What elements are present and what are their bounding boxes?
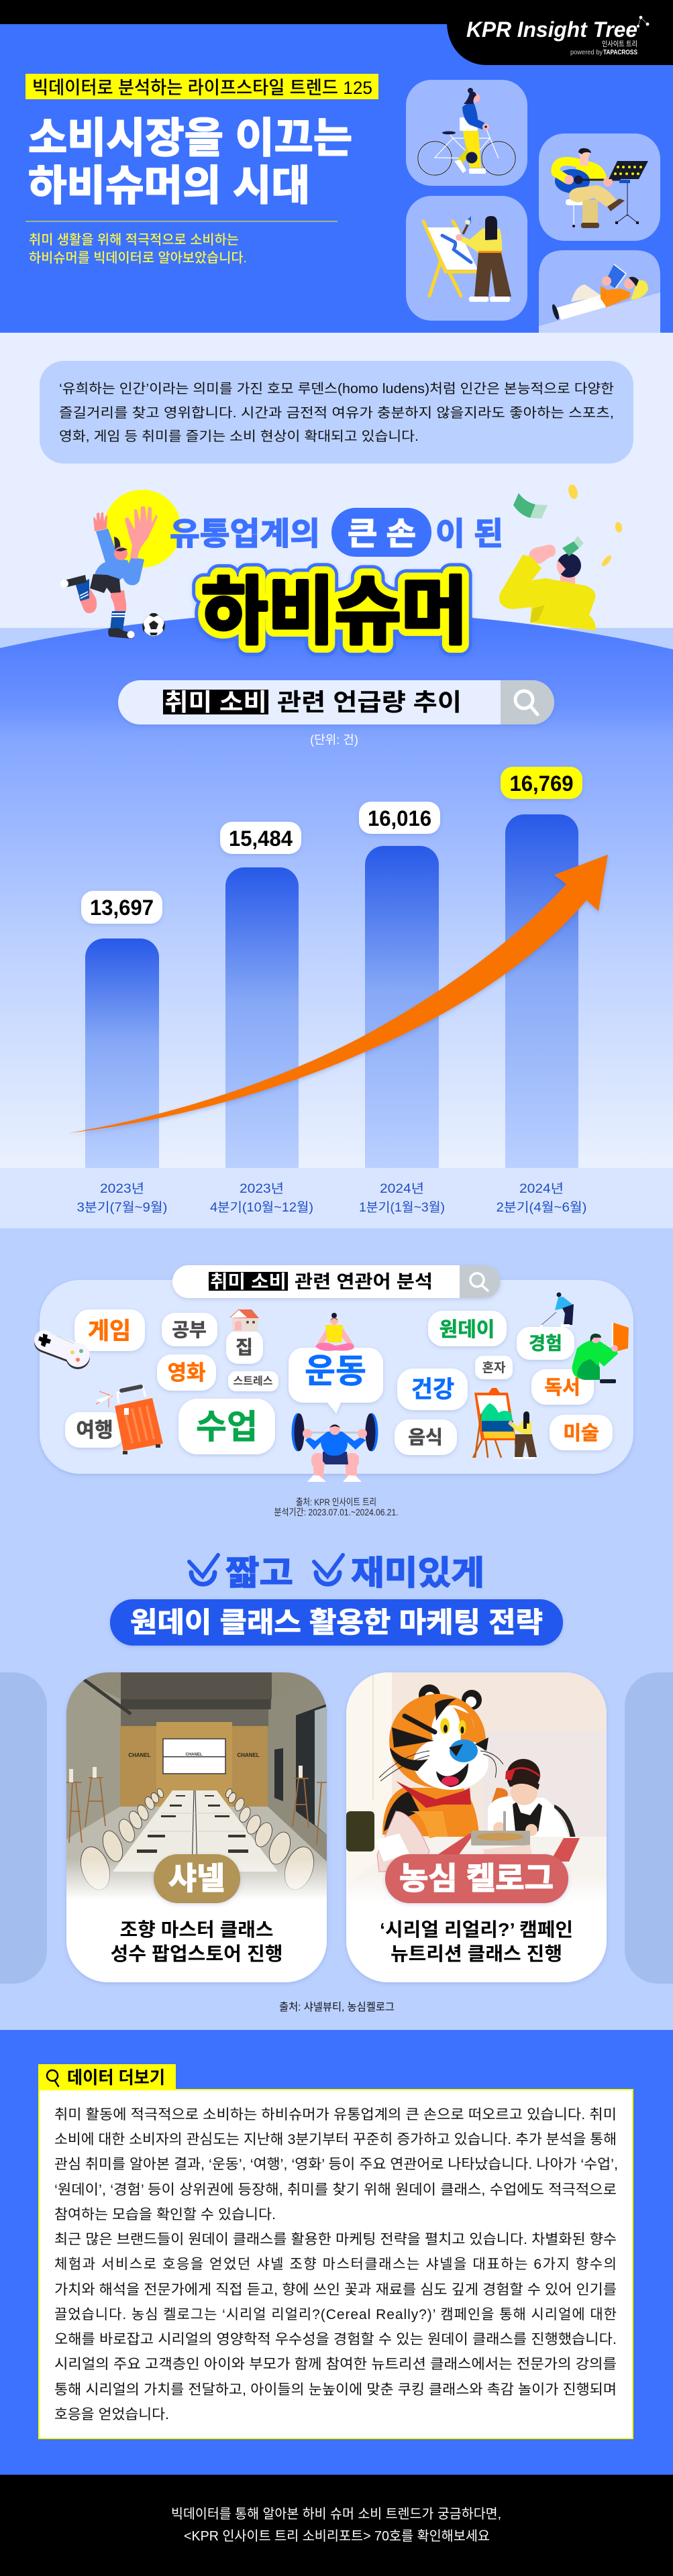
photo: Chanel class room: CHANEL xyxy=(237,1752,260,1758)
axis labels: 2분기(4월~6월) xyxy=(497,1200,586,1215)
card: Chanel xyxy=(66,1672,327,1984)
chart title search bar: 취미 소비 xyxy=(164,688,267,716)
heading: short and fun xyxy=(189,1554,484,1592)
word labels: 미술 xyxy=(563,1422,599,1444)
axis labels: 2023년 xyxy=(100,1181,144,1196)
photo: tiger mascot and child xyxy=(346,1672,607,1984)
bar chart: 13,697 xyxy=(90,896,154,920)
icon: house xyxy=(230,1309,259,1332)
main title: 하비슈머의 시대 xyxy=(28,163,310,209)
illustration: soccer player xyxy=(60,506,158,639)
illustration: golfer xyxy=(540,1292,574,1328)
icon: check two xyxy=(314,1555,343,1585)
panel: analysis text: 통해 시리얼의 가치를 전달하고, 아이들의 눈높이에 맞춘 쿠킹 클래스와 촉감 놀이가 진행되며 xyxy=(54,2382,617,2398)
child xyxy=(488,1796,569,1837)
tab: more data: 데이터 더보기 xyxy=(67,2068,165,2088)
panel: analysis text: 호응을 얻었습니다. xyxy=(54,2407,169,2422)
icon: game controller xyxy=(34,1330,90,1369)
panel: analysis text: 가치와 해석을 전문가에게 직접 듣고, 향에 쓰인 꽃과 재료를 심도 깊게 경험할 수 있어 인기를 xyxy=(54,2282,617,2298)
header logo bar: powered by xyxy=(570,49,603,56)
word labels: 게임 xyxy=(88,1318,131,1344)
table xyxy=(113,1790,278,1872)
Chanel caption xyxy=(110,1919,283,1964)
card: painter xyxy=(406,196,527,321)
word labels xyxy=(76,1318,599,1448)
search bar: related words: 취미 소비 xyxy=(210,1272,287,1292)
table xyxy=(425,1837,607,1888)
stools xyxy=(66,1778,327,1845)
chart title search bar xyxy=(118,680,554,724)
word labels: 여행 xyxy=(76,1419,113,1442)
card: guitarist xyxy=(539,133,660,241)
icon: check one xyxy=(189,1555,218,1585)
footer: 빅데이터를 통해 알아본 하비 슈머 소비 트렌드가 궁금하다면, xyxy=(171,2506,501,2522)
tiger head xyxy=(419,1684,440,1697)
panel: analysis text: ‘원데이’, ‘경험’ 등이 상위권에 등장해, 취미를 찾기 위해 원데이 클래스, 수업에도 적극적으로 xyxy=(54,2182,617,2198)
axis labels: 2023년 xyxy=(240,1181,284,1196)
hero word: hobby-sumer: 하비슈머 xyxy=(201,571,468,653)
growth arrow xyxy=(68,855,608,1133)
side card left xyxy=(0,1672,47,1984)
word labels: 스트레스 xyxy=(234,1375,273,1387)
word labels: 집 xyxy=(236,1337,253,1358)
axis labels: 2024년 xyxy=(519,1181,564,1196)
heading pill xyxy=(110,1599,563,1646)
heading pill: 원데이 클래스 활용한 마케팅 전략 xyxy=(130,1607,543,1638)
illustration: yoga woman xyxy=(315,1313,354,1351)
icon: suitcase and plane xyxy=(96,1386,163,1454)
side card right xyxy=(625,1672,673,1984)
place settings xyxy=(137,1795,248,1853)
bar chart: 16,769 xyxy=(510,771,573,796)
subtitle: 하비슈머를 빅데이터로 알아보았습니다. xyxy=(29,250,247,266)
footer: <KPR 인사이트 트리 소비리포트> 70호를 확인해보세요 xyxy=(184,2528,490,2544)
photo source: 출처: 샤넬뷰티, 농심켈로그 xyxy=(279,2001,395,2013)
subtitle xyxy=(29,232,247,266)
card: cyclist xyxy=(406,80,527,186)
source and period credit: 출처: KPR 인사이트 트리 xyxy=(296,1497,376,1507)
panel: analysis text: 최근 많은 브랜드들이 원데이 클래스를 활용한 마케팅 전략을 펼치고 있습니다. 차별화된 향수 xyxy=(54,2232,617,2247)
header logo bar: 인사이트 트리 xyxy=(602,40,637,48)
Kellogg caption: ‘시리얼 리얼리?’ 캠페인 xyxy=(380,1919,573,1940)
word labels: 건강 xyxy=(411,1377,454,1403)
search bar: related words: 관련 연관어 분석 xyxy=(295,1272,433,1292)
photo: Chanel class room xyxy=(66,1672,327,1984)
word labels: 운동 xyxy=(305,1352,366,1390)
tiger body xyxy=(382,1788,479,1838)
word labels: 독서 xyxy=(544,1377,580,1399)
bottom blue section xyxy=(0,2030,673,2475)
brand pill: Nongshim Kellogg: 농심 켈로그 xyxy=(399,1861,554,1896)
axis labels: 4분기(10월~12월) xyxy=(210,1200,313,1215)
bar chart xyxy=(81,767,582,1168)
footer xyxy=(0,2475,673,2576)
panel: analysis text: 소비에 대한 소비자의 관심도는 지난해 3분기부터 꾸준히 증가하고 있습니다. 추가 분석을 통해 xyxy=(54,2132,617,2147)
panel: analysis text: 오해를 바로잡고 시리얼의 영양학적 우수성을 경험할 수 있는 원데이 클래스를 진행했습니다. xyxy=(54,2332,617,2347)
axis labels: 3분기(7월~9월) xyxy=(76,1200,168,1215)
panel: analysis text: 체험과 서비스로 호응을 얻었던 샤넬 조향 마스터클래스는 샤넬을 대표하는 6가지 향수의 xyxy=(54,2257,617,2272)
Kellogg caption: 뉴트리션 클래스 진행 xyxy=(391,1943,562,1964)
word labels: 공부 xyxy=(172,1320,207,1340)
Chanel caption: 조향 마스터 클래스 xyxy=(119,1919,274,1940)
intro text panel xyxy=(40,361,633,464)
bar chart: 15,484 xyxy=(229,826,293,851)
intro text panel: 영화, 게임 등 취미를 즐기는 소비 현상이 확대되고 있습니다. xyxy=(59,429,419,444)
panel: analysis text xyxy=(39,2090,633,2438)
main title xyxy=(28,115,352,209)
axis labels xyxy=(76,1181,586,1215)
word pills xyxy=(65,1309,613,1455)
heading: short and fun: 짧고 xyxy=(225,1554,293,1592)
illustration: painter and easel xyxy=(473,1388,537,1459)
Kellogg caption xyxy=(380,1919,573,1964)
brand pill: Nongshim Kellogg xyxy=(385,1854,568,1903)
illustration: money and man xyxy=(499,484,623,631)
series tag: 빅데이터로 분석하는 라이프스타일 트렌드 125 xyxy=(32,78,372,98)
word labels: 원데이 xyxy=(439,1319,495,1341)
unit note: (단위: 건) xyxy=(310,733,358,747)
gradient background hill xyxy=(0,611,673,1228)
panel: analysis text: 시리얼의 주요 고객층인 아이와 부모가 함께 참여한 뉴트리션 클래스에서는 전문가의 강의를 xyxy=(54,2357,617,2372)
brand pill: Chanel: 샤넬 xyxy=(168,1861,225,1896)
photo: Chanel class room: CHANEL xyxy=(128,1752,151,1758)
word labels: 영화 xyxy=(167,1361,206,1385)
source and period credit: 분석기간: 2023.07.01.~2024.06.21. xyxy=(274,1507,399,1517)
intro text panel: ‘유희하는 인간’이라는 의미를 가진 호모 루덴스(homo ludens)처럼 인간은 본능적으로 다양한 xyxy=(59,381,614,396)
word labels: 수업 xyxy=(196,1408,258,1446)
bar chart: 16,016 xyxy=(368,806,431,830)
heading: short and fun: 재미있게 xyxy=(351,1554,484,1592)
panel: analysis text: 참여하는 모습을 확인할 수 있습니다. xyxy=(54,2207,276,2222)
illustration: weight lifter xyxy=(291,1413,378,1482)
chairs xyxy=(76,1788,319,1894)
main title: 소비시장을 이끄는 xyxy=(28,115,352,162)
hero heading: 유통업계의 xyxy=(170,516,320,551)
panel: analysis text: 끌었습니다. 농심 켈로그는 ‘시리얼 리얼리?(Cereal Really?)’ 캠페인을 통해 시리얼에 대한 xyxy=(54,2307,617,2322)
photo: Chanel class room: CHANEL xyxy=(185,1753,203,1757)
illustration: reader on green xyxy=(572,1322,629,1383)
axis labels: 1분기(1월~3월) xyxy=(359,1200,445,1215)
panel: analysis text: 취미 활동에 적극적으로 소비하는 하비슈머가 유통업계의 큰 손으로 떠오르고 있습니다. 취미 xyxy=(54,2107,617,2123)
header logo bar: TAPACROSS xyxy=(603,49,637,56)
Chanel caption: 성수 팝업스토어 진행 xyxy=(110,1943,283,1964)
tab: more data xyxy=(38,2064,176,2090)
hero word: hobby-sumer: 하비슈머 xyxy=(201,571,468,653)
gift bag and card xyxy=(377,1811,429,1872)
brand pill: Chanel xyxy=(154,1854,240,1903)
source and period credit xyxy=(274,1497,399,1517)
panel: analysis text: 관심 취미를 알아본 결과, ‘운동’, ‘여행’, ‘영화’ 등이 주요 연관어로 나타났습니다. 나아가 ‘수업’, xyxy=(54,2157,618,2172)
icon: soccer ball xyxy=(142,613,165,636)
hero word: hobby-sumer: 하비슈머 xyxy=(201,571,468,653)
card: Nongshim Kellogg xyxy=(346,1672,607,1984)
chart title search bar: 관련 언급량 추이 xyxy=(277,688,462,716)
word labels: 음식 xyxy=(408,1427,443,1448)
panel: related word cloud xyxy=(34,1265,633,1482)
word labels: 경험 xyxy=(529,1334,562,1354)
hero heading: 이 된 xyxy=(435,516,503,551)
subtitle: 취미 생활을 위해 적극적으로 소비하는 xyxy=(29,232,239,248)
axis labels: 2024년 xyxy=(380,1181,424,1196)
card: reader xyxy=(539,250,660,333)
hero heading xyxy=(170,508,503,557)
intro text panel: 즐길거리를 찾고 영위합니다. 시간과 금전적 여유가 충분하지 않을지라도 좋아하는 스포츠, xyxy=(59,405,614,421)
hero heading: 큰 손 xyxy=(348,516,416,551)
word labels: 혼자 xyxy=(482,1360,506,1375)
search bar: related words xyxy=(172,1265,501,1298)
header logo bar xyxy=(0,0,673,65)
header logo bar: KPR Insight Tree xyxy=(466,17,637,42)
icon: yellow sun circle xyxy=(103,490,181,568)
